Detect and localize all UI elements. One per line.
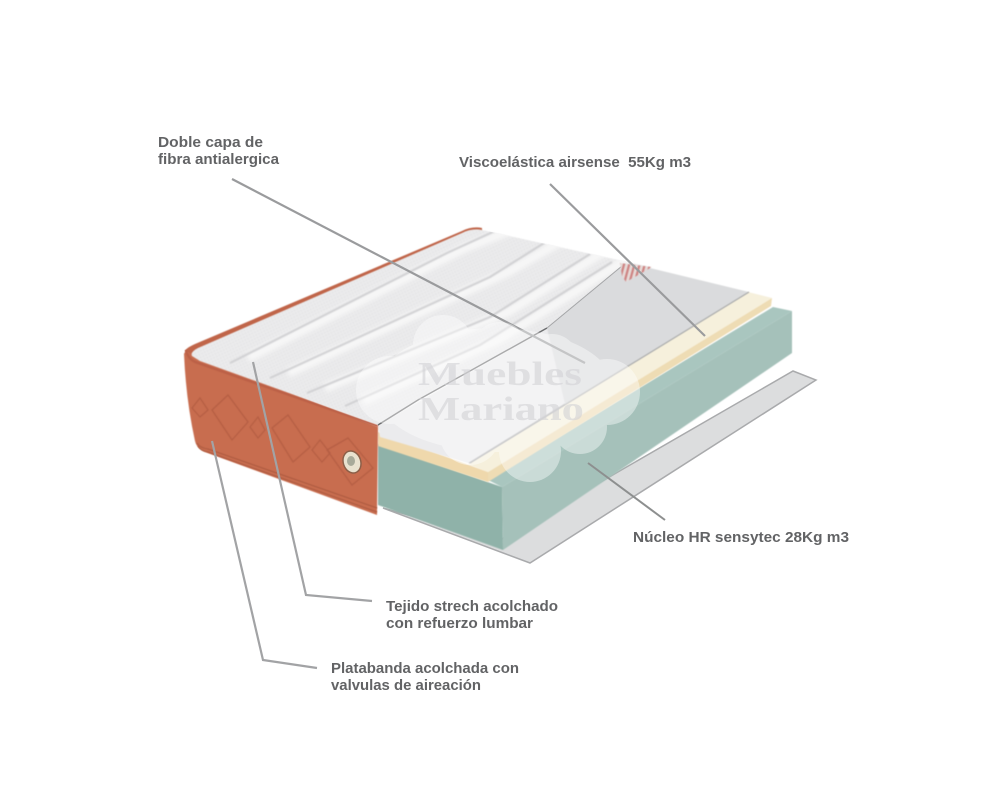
label: platabanda: Platabanda acolchada con xyxy=(331,660,519,677)
viscoelastic front face xyxy=(378,432,488,482)
quilting channels xyxy=(230,225,630,406)
leader line: nucleo xyxy=(588,463,665,520)
label: doble capa xyxy=(158,134,280,168)
label: tejido: Tejido strech acolchado xyxy=(386,598,558,615)
watermark text xyxy=(418,356,584,428)
label: platabanda xyxy=(331,660,519,694)
label: tejido xyxy=(386,598,558,632)
front piping xyxy=(186,350,378,426)
viscoelastic layer xyxy=(378,292,772,482)
leader line: fibra antialergica xyxy=(232,179,585,363)
cut shadow xyxy=(547,266,622,328)
mattress infographic xyxy=(158,136,848,690)
watermark text: Muebles xyxy=(418,356,582,393)
watermark cloud xyxy=(356,315,640,482)
base sheet under mattress xyxy=(383,371,816,563)
foam right face xyxy=(502,311,792,550)
ventilation valve xyxy=(339,448,365,476)
watermark text: Mariano xyxy=(418,391,584,428)
label: tejido: con refuerzo lumbar xyxy=(386,615,533,632)
viscoelastic right face xyxy=(488,298,772,482)
viscoelastic top face xyxy=(468,292,772,472)
side panel body xyxy=(184,352,378,515)
grey inner fibre layer xyxy=(380,262,749,463)
foam top face xyxy=(488,307,792,487)
label: platabanda: valvulas de aireación xyxy=(331,677,481,694)
leader line: tejido xyxy=(253,362,372,601)
label: doble capa: fibra antialergica xyxy=(158,151,280,168)
quilted top fabric xyxy=(192,225,652,425)
white fibre layer xyxy=(378,328,565,463)
lower seam xyxy=(197,443,377,512)
red hatched fabric corner xyxy=(620,263,652,282)
quilted diamonds xyxy=(192,395,373,485)
orange side panel xyxy=(184,227,482,515)
leader line: platabanda xyxy=(212,441,317,668)
label: nucleo: Núcleo HR sensytec 28Kg m3 xyxy=(633,529,849,546)
top piping xyxy=(185,227,482,357)
foam front face xyxy=(378,444,503,550)
label: doble capa: Doble capa de xyxy=(158,134,263,151)
foam core: HR sensytec xyxy=(378,307,792,550)
label: viscoelastica: Viscoelástica airsense 55Kg m3 xyxy=(459,154,691,171)
leader line: viscoelastica xyxy=(550,184,705,336)
